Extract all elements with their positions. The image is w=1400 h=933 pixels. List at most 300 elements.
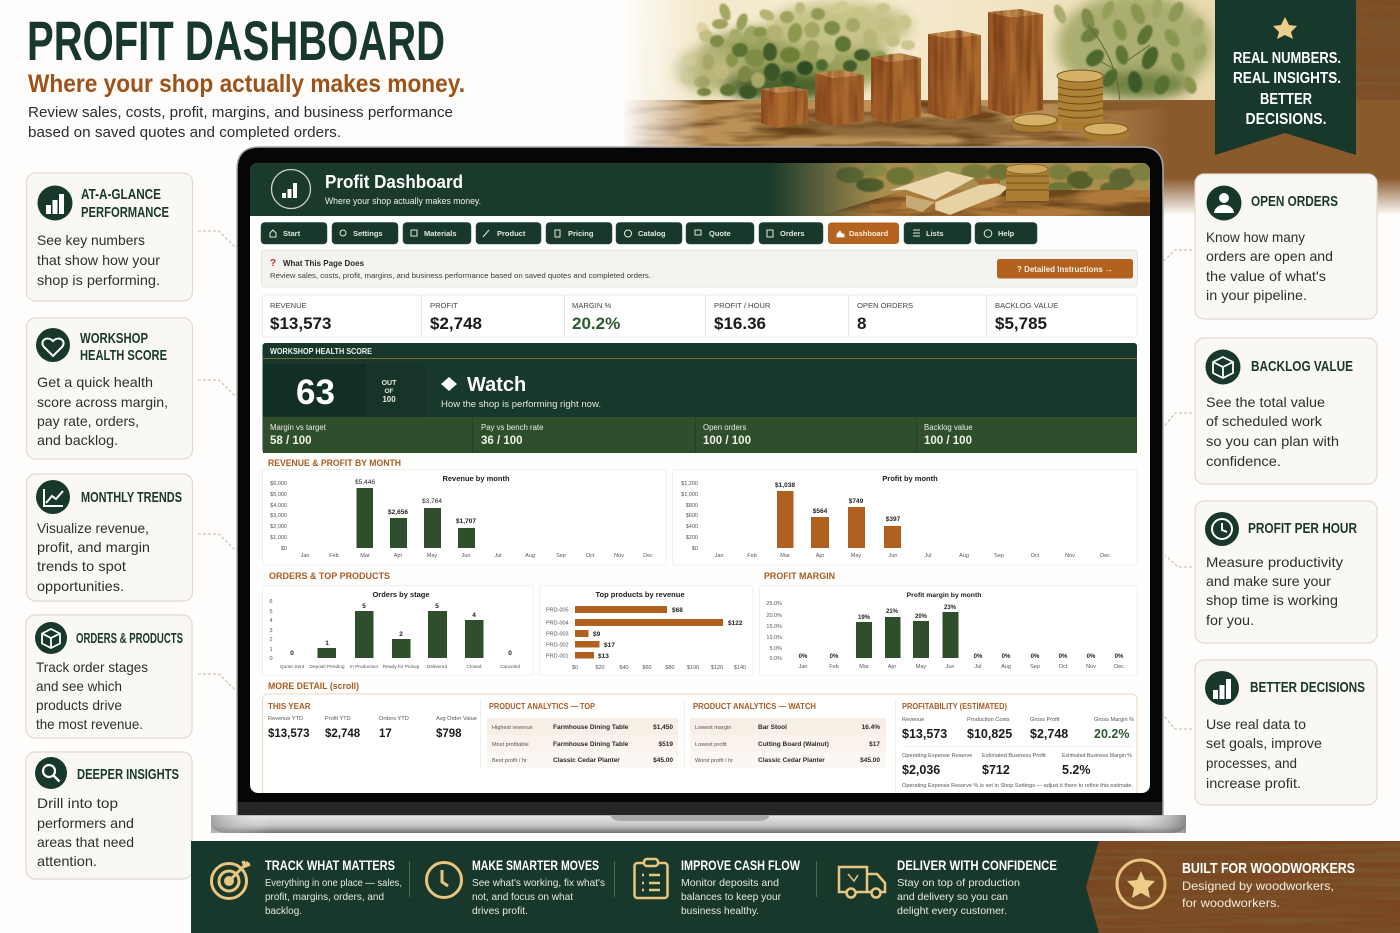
product analytics top: Most profitable <box>492 742 529 748</box>
profitability estimated: Revenue <box>902 717 924 723</box>
health sub-scores <box>263 417 1137 453</box>
health sub-scores: Backlog value <box>924 423 973 432</box>
chart: top products by revenue: PRD-002 <box>546 642 569 648</box>
item: deliver with confidence: and delivery so you can <box>897 892 1008 903</box>
item: track what matters: backlog. <box>265 906 302 917</box>
product analytics top: PRODUCT ANALYTICS — TOP <box>489 702 596 711</box>
chart: revenue by month: Jun <box>462 553 470 559</box>
chart: profit by month <box>672 470 1137 565</box>
chart: profit by month: $400 <box>686 524 698 530</box>
body text: for you. <box>1206 612 1254 628</box>
app header <box>250 163 1154 216</box>
chart: profit by month: $0 <box>692 546 698 552</box>
chart: profit margin by month: Profit margin by month <box>907 592 981 599</box>
workshop health score panel: WORKSHOP HEALTH SCORE <box>270 347 373 356</box>
body text: Measure productivity <box>1206 554 1343 570</box>
item: track what matters: Everything in one place — sales, <box>265 878 402 889</box>
profitability estimated <box>902 702 1134 789</box>
health score number: 63 <box>296 373 335 412</box>
item: track what matters: TRACK WHAT MATTERS <box>265 857 395 873</box>
KPI row <box>262 295 1137 337</box>
navigation bar: Quote <box>709 229 731 238</box>
chart: revenue by month: $1,000 <box>270 535 287 541</box>
app subtitle: Where your shop actually makes money. <box>325 196 481 206</box>
chart: revenue by month: May <box>427 553 437 559</box>
heading: WORKSHOP <box>80 330 148 347</box>
chart: top products by revenue: $120 <box>711 665 723 671</box>
body text <box>37 795 134 869</box>
panel: open orders <box>1195 174 1377 319</box>
chart: orders by stage: 0 <box>290 650 294 657</box>
body text: profit, and margin <box>37 539 150 555</box>
profitability estimated: $13,573 <box>902 727 947 741</box>
body text: the most revenue. <box>36 716 143 732</box>
body text <box>37 520 150 594</box>
product analytics top <box>487 702 678 768</box>
product analytics watch: Cutting Board (Walnut) <box>758 741 829 748</box>
chart: profit margin by month: 0% <box>1002 654 1011 660</box>
ribbon text: DECISIONS. <box>1246 111 1326 128</box>
chart: top products by revenue: $17 <box>604 642 615 649</box>
body text: Get a quick health <box>37 374 153 390</box>
profitability estimated: 5.2% <box>1062 763 1090 777</box>
chart: profit margin by month: 20.0% <box>766 613 782 619</box>
this year: Avg Order Value <box>436 716 477 722</box>
profitability estimated: Gross Margin % <box>1094 717 1134 723</box>
profitability estimated: $712 <box>982 763 1010 777</box>
chart: profit by month: $800 <box>686 503 698 509</box>
item: make smarter moves: drives profit. <box>472 906 528 917</box>
body text <box>1206 554 1343 628</box>
item: make smarter moves <box>426 857 605 917</box>
chart: orders by stage: 2 <box>269 637 273 643</box>
chart: orders by stage <box>262 586 533 675</box>
navigation bar: Catalog <box>638 229 666 238</box>
chart: revenue by month: Sep <box>556 553 566 559</box>
chart: revenue by month: Oct <box>586 553 595 559</box>
chart: orders by stage: Canceled <box>500 664 520 670</box>
chart: revenue by month: $2,656 <box>388 509 408 516</box>
chart: revenue by month: $5,000 <box>270 492 287 498</box>
heading: more detail: MORE DETAIL (scroll) <box>268 681 359 692</box>
body text <box>1206 716 1322 791</box>
body text: the value of what's <box>1206 268 1326 284</box>
chart: profit by month: Jul <box>924 553 932 559</box>
body text: performers and <box>37 815 134 831</box>
chart: orders by stage: 5 <box>362 603 366 610</box>
chart: profit by month: May <box>851 553 861 559</box>
item: built for woodworkers: Designed by woodworkers, <box>1182 879 1334 893</box>
heading: revenue and profit by month: REVENUE & PROFIT BY MONTH <box>268 458 401 469</box>
product analytics watch: Lowest margin <box>695 725 731 731</box>
body text: shop is performing. <box>37 272 160 288</box>
navigation bar: Pricing <box>568 229 594 238</box>
product analytics top: Farmhouse Dining Table <box>553 724 629 731</box>
chart: profit by month: $1,000 <box>681 492 698 498</box>
product analytics top: Best profit / hr <box>492 758 527 764</box>
icon: star <box>1273 17 1297 39</box>
hero illustration: wooden bar chart and coins <box>600 0 1400 220</box>
icon: star medallion <box>1117 860 1165 908</box>
health sub-scores: 100 / 100 <box>703 435 751 447</box>
product analytics watch: 16.4% <box>862 724 880 731</box>
chart: profit by month: Jan <box>715 553 723 559</box>
chart: orders by stage: Orders by stage <box>372 590 430 599</box>
chart: top products by revenue: $13 <box>598 653 609 660</box>
icon: truck <box>839 867 885 898</box>
chart: orders by stage: Closed <box>467 664 482 670</box>
item: improve cash flow: Monitor deposits and <box>681 878 779 889</box>
body text: attention. <box>37 853 97 869</box>
chart: profit by month: Oct <box>1031 553 1040 559</box>
body text: shop time is working <box>1206 592 1338 608</box>
KPI row: $16.36 <box>714 314 766 333</box>
panel: backlog value <box>1195 338 1377 484</box>
chart: profit margin by month: Apr <box>888 664 896 670</box>
health sub-scores: Pay vs bench rate <box>481 423 543 432</box>
product analytics watch: Bar Stool <box>758 724 787 731</box>
product analytics watch: Worst profit / hr <box>695 758 733 764</box>
chart: revenue by month: $1,707 <box>456 518 476 525</box>
KPI row: $2,748 <box>430 314 482 333</box>
chart: profit margin by month: 0.0% <box>769 656 782 662</box>
heading: PROFIT PER HOUR <box>1248 520 1357 537</box>
chart: revenue by month: Feb <box>329 553 339 559</box>
chart: profit margin by month: 0% <box>1115 654 1124 660</box>
profitability estimated: $2,748 <box>1030 727 1068 741</box>
chart: top products by revenue: $0 <box>572 665 578 671</box>
chart: revenue by month: Mar <box>360 553 370 559</box>
product analytics watch: Lowest profit <box>695 742 727 748</box>
chart: profit margin by month: 15.0% <box>766 624 782 630</box>
chart: revenue by month: $3,764 <box>422 498 442 505</box>
chart: orders by stage: 0 <box>269 656 273 662</box>
chart: profit margin by month: 0% <box>830 654 839 660</box>
chart: orders by stage: Quote Sent <box>280 664 305 670</box>
chart: profit by month: Dec <box>1100 553 1110 559</box>
item: deliver with confidence: Stay on top of production <box>897 878 1020 889</box>
heading <box>80 330 167 364</box>
product analytics top: $1,450 <box>653 724 673 731</box>
chart: orders by stage: 5 <box>435 603 439 610</box>
profitability estimated: Estimated Business Margin % <box>1062 753 1132 759</box>
this year: Profit YTD <box>325 716 351 722</box>
body text: trends to spot <box>37 558 126 574</box>
item: make smarter moves: See what's working, fix what's <box>472 878 605 889</box>
KPI row: 8 <box>857 314 866 333</box>
body text: products drive <box>36 697 122 713</box>
navigation bar: Settings <box>353 229 383 238</box>
more detail panel <box>262 694 1137 800</box>
chart: profit margin by month: Dec <box>1114 664 1124 670</box>
product analytics watch: $45.00 <box>860 757 880 764</box>
chart: top products by revenue: PRD-004 <box>546 620 569 626</box>
chart: profit margin by month <box>760 586 1137 675</box>
ribbon text <box>1233 50 1341 128</box>
chart: profit by month: $397 <box>886 516 901 523</box>
body text: areas that need <box>37 834 134 850</box>
chart: orders by stage: Delivered <box>427 664 447 670</box>
chart: profit by month: Sep <box>994 553 1004 559</box>
icon: clock <box>1205 512 1239 546</box>
out of 100: 100 <box>382 395 396 404</box>
health sub-scores: Margin vs target <box>270 423 327 432</box>
out of 100: OUT <box>382 380 397 387</box>
chart: top products by revenue: Top products by revenue <box>595 590 685 599</box>
chart: orders by stage: 5 <box>269 609 273 615</box>
this year: Revenue YTD <box>268 716 303 722</box>
profitability estimated: Production Costs <box>967 717 1010 723</box>
product analytics watch: $17 <box>869 741 880 748</box>
chart: revenue by month: Jan <box>301 553 309 559</box>
heading: AT-A-GLANCE <box>81 186 161 203</box>
panel: deeper insights <box>26 752 192 879</box>
KPI row: MARGIN % <box>572 301 611 310</box>
heading: OPEN ORDERS <box>1251 193 1338 210</box>
panel: at-a-glance performance <box>26 173 192 301</box>
chart: orders by stage: Deposit Pending <box>309 664 345 670</box>
chart: top products by revenue: $40 <box>619 665 629 671</box>
chart: top products by revenue <box>540 586 753 675</box>
button: detailed instructions: ? Detailed Instructions → <box>1017 265 1113 274</box>
chart: profit margin by month: Oct <box>1059 664 1068 670</box>
item: improve cash flow: IMPROVE CASH FLOW <box>681 857 801 873</box>
this year: $13,573 <box>268 728 310 740</box>
body text: increase profit. <box>1206 775 1301 791</box>
item: improve cash flow: business healthy. <box>681 906 759 917</box>
laptop <box>211 147 1186 833</box>
chart: orders by stage: 1 <box>269 647 273 653</box>
chart: top products by revenue: PRD-001 <box>546 654 569 660</box>
chart: orders by stage: 4 <box>269 618 273 624</box>
subtitle: Where your shop actually makes money. <box>28 70 465 98</box>
KPI row: BACKLOG VALUE <box>995 301 1058 310</box>
heading: ORDERS & PRODUCTS <box>76 630 183 647</box>
navigation bar: Help <box>998 229 1015 238</box>
laptop base <box>211 815 1186 833</box>
chart: profit by month: Feb <box>747 553 757 559</box>
what this page does bar: What This Page Does <box>283 258 364 268</box>
profitability estimated: PROFITABILITY (ESTIMATED) <box>902 702 1007 711</box>
product analytics top: Highest revenue <box>492 725 533 731</box>
heading: orders and top products: ORDERS & TOP PRODUCTS <box>269 571 390 582</box>
body text: and make sure your <box>1206 573 1331 589</box>
chart: profit margin by month: Jan <box>799 664 807 670</box>
body text <box>1206 394 1339 469</box>
product analytics watch: PRODUCT ANALYTICS — WATCH <box>693 702 816 711</box>
chart: top products by revenue: $140 <box>734 665 746 671</box>
chart: profit margin by month: 0% <box>974 654 983 660</box>
chart: revenue by month: Nov <box>614 553 624 559</box>
heading: DEEPER INSIGHTS <box>77 766 179 783</box>
chart: orders by stage: 3 <box>269 628 273 634</box>
chart: orders by stage: 2 <box>399 631 403 638</box>
icon: box <box>35 622 67 654</box>
KPI row: $5,785 <box>995 314 1047 333</box>
item: improve cash flow <box>634 857 801 917</box>
chart: profit margin by month: 10.0% <box>766 635 782 641</box>
body text <box>1206 229 1333 303</box>
heading: PERFORMANCE <box>81 204 169 221</box>
KPI row: OPEN ORDERS <box>857 301 913 310</box>
cutting boards <box>869 171 1017 215</box>
icon: bars <box>38 186 72 220</box>
chart: profit margin by month: 20% <box>915 614 928 620</box>
body text: pay rate, orders, <box>37 413 139 429</box>
chart: profit by month: Mar <box>780 553 790 559</box>
chart: profit by month: Aug <box>959 553 969 559</box>
app logo <box>272 170 310 208</box>
profitability estimated: 20.2% <box>1094 727 1129 741</box>
chart: profit margin by month: 0% <box>1087 654 1096 660</box>
footer band <box>191 841 1400 933</box>
button: detailed instructions <box>997 259 1133 278</box>
chart: profit margin by month: May <box>916 664 926 670</box>
chart: profit by month: $600 <box>686 513 698 519</box>
what this page does bar: Review sales, costs, profit, margins, and business performance based on saved quotes and completed orders. <box>270 271 651 280</box>
KPI row: 20.2% <box>572 314 620 333</box>
chart: profit by month: $564 <box>813 508 828 515</box>
chart: top products by revenue: $9 <box>593 631 601 638</box>
chart: orders by stage: 0 <box>508 650 512 657</box>
profitability estimated: Gross Profit <box>1030 717 1060 723</box>
chart: top products by revenue: $68 <box>672 607 683 614</box>
navigation bar <box>261 222 1037 244</box>
chart: profit margin by month: Jul <box>974 664 982 670</box>
chart: revenue by month: Revenue by month <box>442 474 510 483</box>
icon: question mark: ? <box>270 258 276 269</box>
body text: See key numbers <box>37 232 145 248</box>
chart: revenue by month: Dec <box>643 553 653 559</box>
panel: orders and products <box>26 615 192 738</box>
intro text: based on saved quotes and completed orders. <box>28 124 341 141</box>
screen <box>250 163 1154 800</box>
out of 100 <box>382 380 396 402</box>
body text: Use real data to <box>1206 716 1306 732</box>
out of 100: OF <box>384 388 394 395</box>
body text: and backlog. <box>37 432 118 448</box>
chart: orders by stage: Ready for Pickup <box>383 664 420 670</box>
item: make smarter moves: MAKE SMARTER MOVES <box>472 857 599 873</box>
item: track what matters: profit, margins, orders, and <box>265 892 384 903</box>
chart: profit by month: $1,200 <box>681 481 698 487</box>
item: built for woodworkers: BUILT FOR WOODWORKERS <box>1182 860 1355 877</box>
workshop health score panel <box>262 343 1137 453</box>
item: deliver with confidence: DELIVER WITH CONFIDENCE <box>897 857 1057 873</box>
body text: See the total value <box>1206 394 1325 410</box>
chart: profit margin by month: 21% <box>886 609 899 615</box>
workshop health score panel: How the shop is performing right now. <box>441 399 601 410</box>
item: track what matters <box>212 857 402 917</box>
body text: Drill into top <box>37 795 118 811</box>
heading: HEALTH SCORE <box>80 347 167 364</box>
heading: BETTER DECISIONS <box>1250 679 1365 696</box>
health sub-scores: 36 / 100 <box>481 435 523 447</box>
chart: revenue by month: Apr <box>394 553 402 559</box>
navigation bar: Dashboard <box>849 229 889 238</box>
laptop bezel <box>237 147 1163 815</box>
chart: orders by stage: 4 <box>472 612 476 619</box>
icon: person <box>1206 186 1242 220</box>
KPI row: REVENUE <box>270 301 307 310</box>
chart: orders by stage: 1 <box>325 640 329 647</box>
body text: and see which <box>36 678 122 694</box>
chart: revenue by month <box>262 470 666 565</box>
chart: profit by month: Apr <box>816 553 824 559</box>
KPI row: PROFIT <box>430 301 458 310</box>
chart: profit by month: $200 <box>686 535 698 541</box>
chart: top products by revenue: $80 <box>665 665 675 671</box>
chart: profit by month: $1,038 <box>775 482 795 489</box>
this year <box>268 702 477 740</box>
chart: top products by revenue: $20 <box>595 665 605 671</box>
item: make smarter moves: not, and focus on what <box>472 892 573 903</box>
product analytics watch <box>690 702 886 768</box>
profitability estimated: $2,036 <box>902 763 940 777</box>
profitability estimated: Estimated Business Profit <box>982 753 1046 759</box>
navigation bar: Start <box>283 229 301 238</box>
KPI row: PROFIT / HOUR <box>714 301 771 310</box>
item: improve cash flow: balances to keep your <box>681 892 782 903</box>
chart: profit margin by month: Feb <box>829 664 839 670</box>
ribbon text: BETTER <box>1260 91 1312 108</box>
chart: profit margin by month: Sep <box>1030 664 1040 670</box>
body text: orders are open and <box>1206 248 1333 264</box>
body text: in your pipeline. <box>1206 287 1307 303</box>
product analytics top: $519 <box>659 741 673 748</box>
chart: profit margin by month: 0% <box>799 654 808 660</box>
body text <box>37 232 160 288</box>
body text: that show how your <box>37 252 160 268</box>
chart: profit margin by month: Jun <box>946 664 954 670</box>
health sub-scores: Open orders <box>703 423 746 432</box>
this year: $798 <box>436 728 462 740</box>
status: Watch <box>467 374 526 396</box>
icon: bars <box>1205 671 1239 705</box>
wood panel <box>1086 841 1400 933</box>
chart: top products by revenue: PRD-003 <box>546 632 569 638</box>
ribbon text: REAL NUMBERS. <box>1233 50 1341 67</box>
body text: confidence. <box>1206 453 1281 469</box>
navigation bar: Materials <box>424 229 457 238</box>
header illustration <box>770 163 1154 216</box>
intro text <box>28 104 453 141</box>
icon: box <box>1206 350 1240 384</box>
what this page does bar <box>262 250 1138 287</box>
panel: better decisions <box>1195 660 1377 805</box>
body text: opportunities. <box>37 578 124 594</box>
chart: revenue by month: $4,000 <box>270 503 287 509</box>
chart: revenue by month: Jul <box>494 553 502 559</box>
chart: profit margin by month: 19% <box>858 615 871 621</box>
body text <box>37 374 168 448</box>
product analytics top: Classic Cedar Planter <box>553 757 620 764</box>
chart: profit margin by month: 25.0% <box>766 601 782 607</box>
item: built for woodworkers <box>1117 860 1355 910</box>
chart: profit margin by month: Nov <box>1086 664 1096 670</box>
navigation bar: Orders <box>780 229 805 238</box>
panel: monthly trends <box>26 474 192 601</box>
heading: BACKLOG VALUE <box>1251 358 1353 375</box>
product analytics watch: Classic Cedar Planter <box>758 757 825 764</box>
this year: $2,748 <box>325 728 361 740</box>
panel: profit per hour <box>1195 501 1377 643</box>
health sub-scores: 100 / 100 <box>924 435 972 447</box>
profitability estimated: Operating Expense Reserve <box>902 753 972 759</box>
profitability estimated: $10,825 <box>967 727 1012 741</box>
product analytics top: Farmhouse Dining Table <box>553 741 629 748</box>
chart: profit margin by month: 5.0% <box>769 646 782 652</box>
